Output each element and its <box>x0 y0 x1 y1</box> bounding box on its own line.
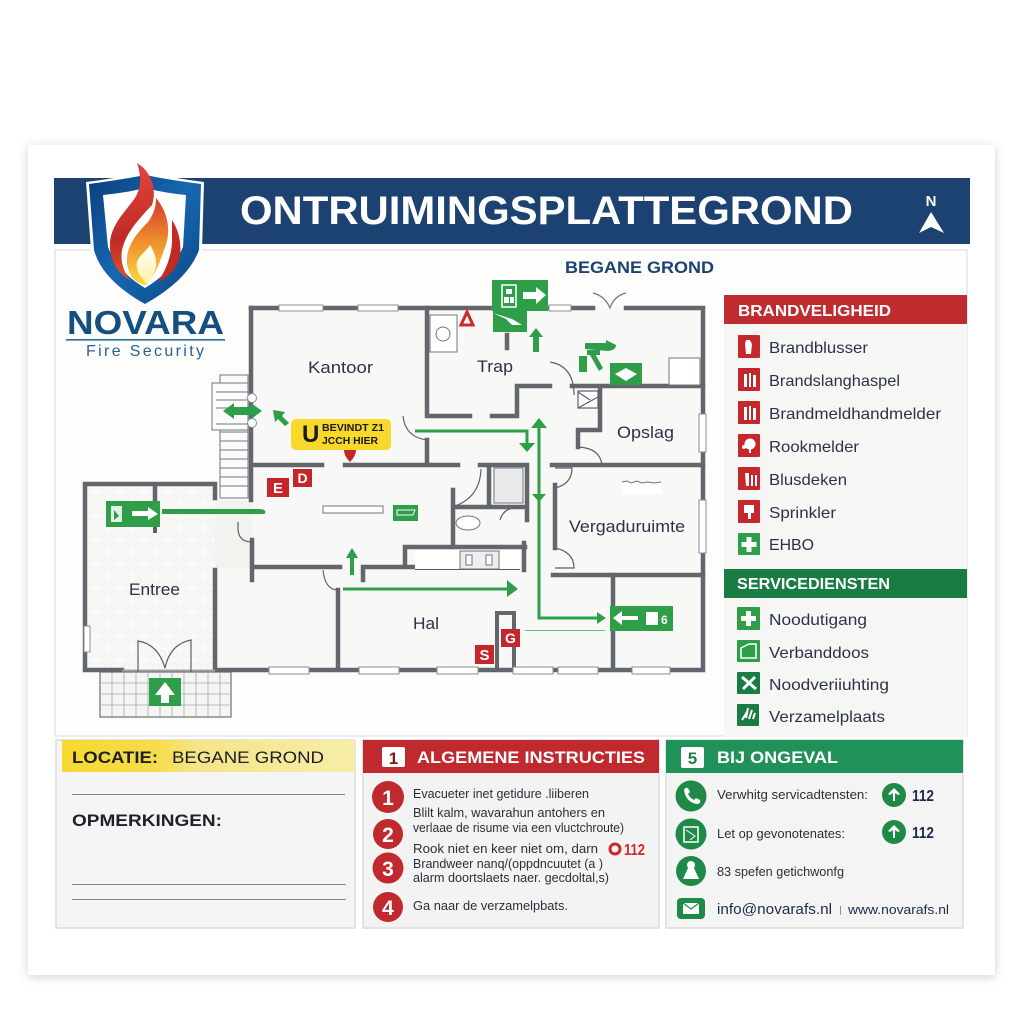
marker: G: G <box>505 630 516 646</box>
sheet <box>28 145 995 975</box>
legend item: Sprinkler <box>738 500 837 523</box>
panel: locatie <box>56 740 355 928</box>
legend item: Rookmelder: Rookmelder <box>769 439 860 456</box>
you are here callout <box>291 419 391 462</box>
room labels: Vergaduruimte <box>569 517 685 536</box>
sign: stair marker <box>493 311 527 332</box>
marker: S <box>475 645 494 664</box>
sign: main entrance <box>149 678 181 706</box>
row: contact <box>677 898 949 919</box>
evacuation routes <box>163 328 606 631</box>
fixtures <box>323 315 700 569</box>
heading: brandveiligheid <box>724 295 967 324</box>
entrance threshold <box>122 670 215 672</box>
step 3: Rook niet en keer niet om, darn <box>413 842 598 856</box>
sign: entree exit <box>106 501 160 533</box>
sign: east exit: 6 <box>661 613 668 627</box>
floors <box>85 308 703 670</box>
legend item: Nooduitgang <box>737 607 867 630</box>
marker: D: D <box>297 470 308 486</box>
room labels <box>129 357 685 633</box>
logo name: NOVARA <box>67 304 224 341</box>
legend item: EHBO: EHBO <box>769 537 814 554</box>
logo tagline: Fire Security <box>86 343 204 360</box>
legend item: Noodverlichting <box>737 672 889 694</box>
marker: D <box>293 469 312 487</box>
location banner: BEGANE GROND <box>172 748 324 767</box>
step 2: Blilt kalm, wavarahun antohers en <box>413 806 605 820</box>
step 2: 2 <box>382 824 394 847</box>
icon: north arrow <box>919 193 944 233</box>
legend item: Sprinkler: Sprinkler <box>769 505 837 522</box>
fire markers <box>267 312 520 664</box>
row: contact: www.novarafs.nl <box>847 902 949 917</box>
step 2: verlaae de risume via een vluctchroute) <box>413 821 624 835</box>
legend item: Blusdeken: Blusdeken <box>769 472 847 489</box>
you are here callout: BEVINDT Z1 <box>322 422 384 434</box>
legend item: EHBO <box>738 533 814 555</box>
step 3: Brandweer nanq/(oppdncuutet (a ) <box>413 857 603 871</box>
walls <box>215 308 703 670</box>
windows <box>84 305 706 674</box>
row: hazards <box>676 818 934 850</box>
step 4: Ga naar de verzamelpbats. <box>413 899 568 913</box>
legend item: Verzamelplaats: Verzamelplaats <box>769 709 885 726</box>
stairs <box>212 375 248 498</box>
remarks heading: OPMERKINGEN: <box>72 811 222 830</box>
legend item: Brandslanghaspel: Brandslanghaspel <box>769 373 900 390</box>
room labels: Trap <box>477 357 513 376</box>
legend item: Verzamelplaats <box>737 704 885 726</box>
icon: north arrow: N <box>926 193 936 210</box>
corridor shading <box>215 500 252 568</box>
accident heading <box>666 740 963 773</box>
floor plan <box>84 280 706 717</box>
step 1: Evacueter inet getidure .liiberen <box>413 787 589 801</box>
doors <box>138 293 626 672</box>
entree floor pattern <box>88 487 214 668</box>
icon: shield with flame <box>86 163 204 307</box>
emergency number: 112 <box>624 842 645 859</box>
row: assembly <box>676 856 844 886</box>
emergency number <box>610 842 645 859</box>
step 4: 4 <box>382 897 394 920</box>
marker: E: E <box>273 480 283 497</box>
sign: extinguisher route <box>579 340 616 372</box>
room labels: Entree <box>129 580 180 599</box>
accident heading: 5 <box>688 749 697 768</box>
step 3: 3 <box>382 858 394 881</box>
row: hazards: Let op gevonotenates: <box>717 827 845 841</box>
marker: alarm triangle <box>461 312 473 325</box>
room labels: Opslag <box>617 423 674 442</box>
kitchen edge <box>415 569 520 570</box>
legend item: Brandmeldhandmelder: Brandmeldhandmelder <box>769 406 942 423</box>
legend item: Brandblusser: Brandblusser <box>769 340 869 357</box>
logo <box>66 163 225 360</box>
sign: east exit <box>610 606 673 631</box>
panel: bij ongeval <box>666 740 963 928</box>
step 2 <box>373 806 624 849</box>
instructions heading: 1 <box>389 749 398 768</box>
header banner <box>54 178 970 244</box>
legend item: Noodverlichting: Noodveriiuhting <box>769 677 889 694</box>
you are here callout: U <box>302 421 319 448</box>
room labels: Hal <box>413 614 439 633</box>
legend item: Verbanddoos: Verbanddoos <box>769 645 869 662</box>
step 4 <box>373 892 568 922</box>
floor subtitle: BEGANE GROND <box>565 258 714 277</box>
heading: brandveiligheid: BRANDVELIGHEID <box>738 303 891 320</box>
row: services: Verwhitg servicadtensten: <box>717 788 868 802</box>
sign: top exit <box>492 280 548 311</box>
legend item: Rookmelder <box>738 434 860 457</box>
marker: G <box>501 629 520 647</box>
you are here callout: JCCH HIER <box>322 435 378 447</box>
legend item: Brandblusser <box>738 335 869 358</box>
legend item: Nooduitgang: Noodutigang <box>769 612 867 629</box>
accident heading: BIJ ONGEVAL <box>717 748 838 767</box>
step 3 <box>372 842 609 885</box>
room labels: Kantoor <box>308 358 373 377</box>
legend item: Brandmeldhandmelder <box>738 401 942 424</box>
sign: first aid <box>610 363 642 385</box>
row: assembly: 83 spefen getichwonfg <box>717 865 844 879</box>
step 1: 1 <box>382 787 394 810</box>
exit signs <box>106 280 673 706</box>
row: contact: info@novarafs.nl <box>717 901 832 918</box>
side door hinges <box>248 394 256 428</box>
map panel <box>55 250 967 736</box>
step 3: alarm doortslaets naer. gecdoltal,s) <box>413 871 609 885</box>
step 1 <box>372 781 589 813</box>
instructions heading <box>363 740 659 773</box>
marker: E <box>267 478 289 497</box>
row: services: 112 <box>912 788 934 805</box>
instructions heading: ALGEMENE INSTRUCTIES <box>417 748 645 767</box>
marker: S: S <box>479 647 490 664</box>
tiled entrance step <box>100 672 231 717</box>
sign: small green marker <box>393 505 418 521</box>
legend item: Blusdeken <box>738 467 847 490</box>
legend item: Verbanddoos <box>737 640 869 662</box>
row: services <box>676 780 934 812</box>
heading: servicediensten <box>724 569 967 598</box>
location banner: LOCATIE: <box>72 748 158 767</box>
heading: servicediensten: SERVICEDIENSTEN <box>737 576 890 593</box>
panel: legend <box>724 295 967 737</box>
title: ONTRUIMINGSPLATTEGROND <box>240 189 853 233</box>
panel: algemene instructies <box>363 740 659 928</box>
legend item: Brandslanghaspel <box>738 368 900 391</box>
row: hazards: 112 <box>912 825 934 842</box>
location banner <box>62 740 355 772</box>
